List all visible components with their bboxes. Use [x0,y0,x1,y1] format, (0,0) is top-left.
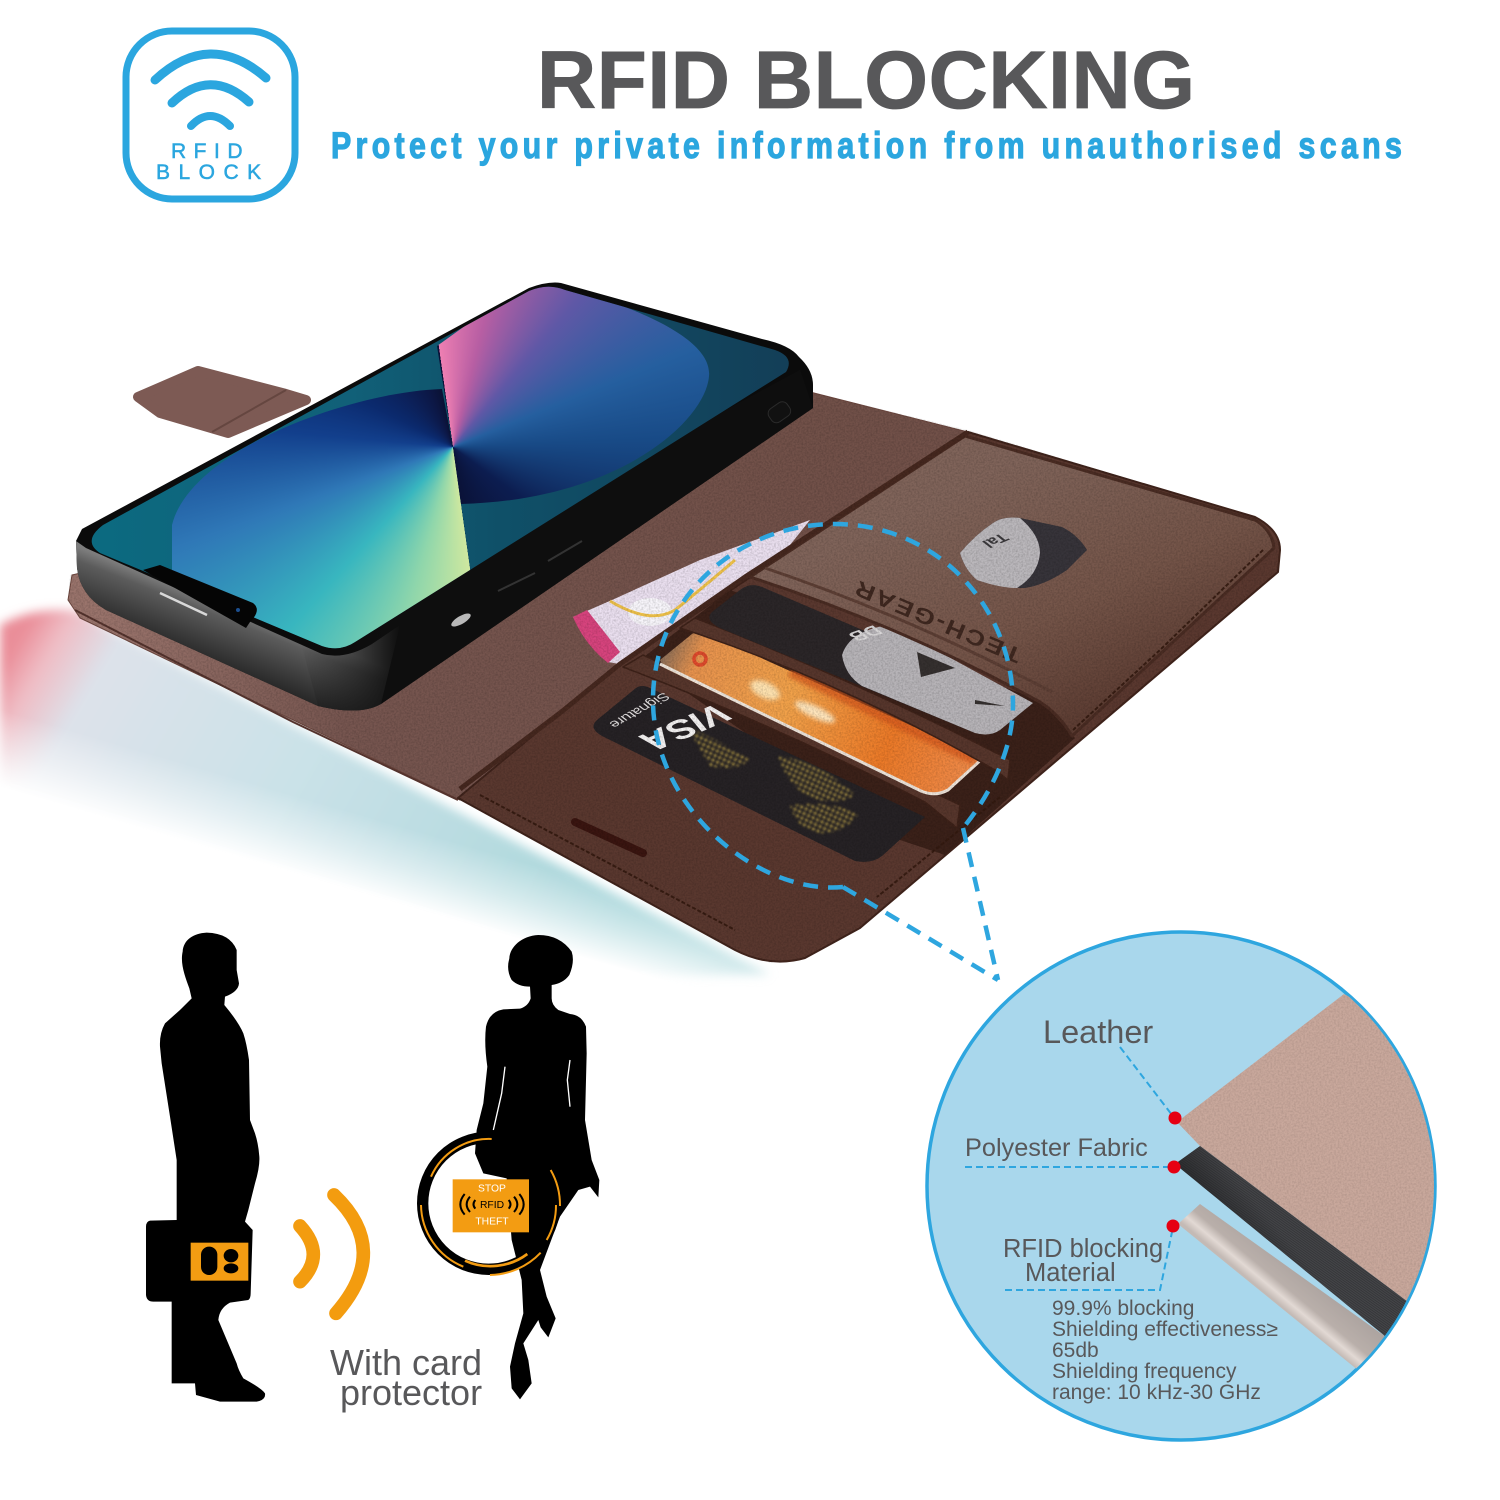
man silhouette with wallet [146,933,363,1402]
seam between lining and panel [460,432,968,789]
stop RFID theft badge [453,1179,529,1232]
stop RFID theft badge: RFID [480,1200,504,1211]
wallet flap tab [138,371,306,433]
dashed callout lines [843,828,998,980]
layer labels: Polyester Fabric [965,1134,1148,1162]
wallet card panel [458,432,1280,962]
card 3 black visa: Signature [605,690,673,730]
pocket 3 lip [623,655,960,828]
card 1 dark and silver [709,585,1033,734]
specification text: 65db [1052,1339,1099,1362]
stop RFID theft badge: STOP [478,1183,506,1194]
dashed magnifier circle [653,524,1013,888]
card 2 orange [660,632,983,794]
card window cutout: Tal [978,531,1012,550]
leather grain overlay [60,380,1290,980]
caption with card protector [330,1342,482,1413]
wallet stitching [480,550,1263,930]
woman silhouette with card protector [421,935,599,1399]
upper pocket lip ridge [765,568,1052,692]
red dot markers [1166,1112,1182,1232]
specification text: 99.9% blocking [1052,1297,1194,1320]
stop RFID theft badge: THEFT [475,1217,509,1228]
phone screen wallpaper [92,286,789,648]
material layers [1178,994,1434,1368]
card 3 black visa [593,686,925,862]
dark pocket interior [640,590,1075,855]
RFID block logo: RFID [171,140,250,163]
wallet lining [68,392,968,800]
orange signal waves [300,1195,363,1313]
phone body [76,283,813,711]
leader lines [965,1047,1172,1290]
card 3 black visa: VISA [630,698,741,757]
layer labels: Material [1025,1259,1116,1287]
upper pocket panel [750,436,1274,736]
specification text [1052,1297,1278,1404]
layer labels [965,1014,1163,1287]
specification text: Shielding frequency [1052,1360,1237,1383]
cross-section lens [927,932,1450,1440]
card window cutout [960,518,1087,588]
finger notch [575,822,643,853]
embossed brand name: TECH-GEAR [852,575,1025,667]
specification text: range: 10 kHz-30 GHz [1052,1381,1261,1404]
protector ring [421,1137,560,1275]
title: RFID BLOCKING [537,35,1195,126]
card icon on bag [191,1243,248,1281]
layer labels: RFID blocking [1003,1235,1163,1263]
pocket 2 lip [680,618,1010,780]
card 1 dark and silver: DB [843,622,886,644]
subtitle: Protect your private information from unauthorised scans [331,125,1402,167]
phone notch [143,565,257,628]
specification text: Shielding effectiveness≥ [1052,1318,1278,1341]
background glow under wallet [0,610,770,980]
banknote in slip pocket [573,520,810,665]
RFID block logo: BLOCK [156,161,270,184]
caption with card protector: With card [330,1342,482,1383]
caption with card protector: protector [340,1372,482,1413]
RFID block logo [126,31,295,199]
layer labels: Leather [1043,1014,1153,1050]
